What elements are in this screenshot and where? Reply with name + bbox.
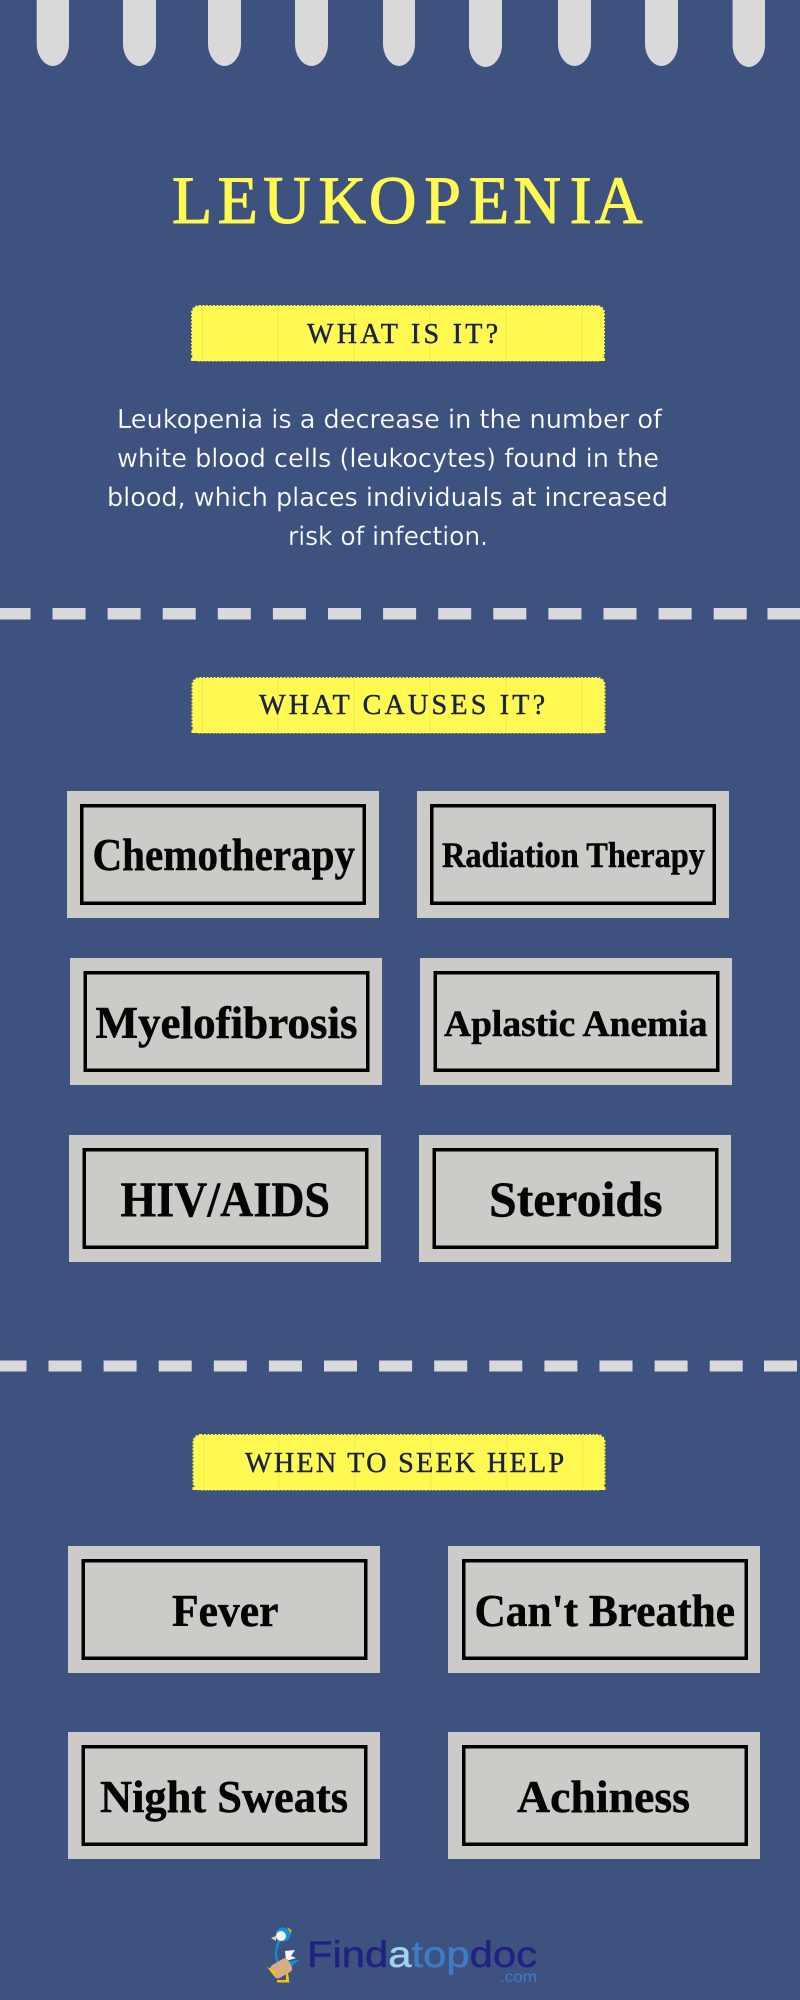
definition text: Leukopenia is a decrease in the number of (117, 405, 663, 435)
symptom card: night sweats (68, 1732, 380, 1859)
section label: what is it (191, 306, 605, 361)
section label: what causes it: WHAT CAUSES IT? (259, 690, 545, 721)
cause card: hiv/aids (69, 1135, 381, 1262)
symptom card: night sweats: Night Sweats (100, 1771, 348, 1822)
section label: when to seek help: WHEN TO SEEK HELP (245, 1448, 564, 1479)
cause card: radiation therapy (417, 791, 729, 918)
cause card: hiv/aids: HIV/AIDS (120, 1171, 330, 1227)
symptom card: can't breathe: Can't Breathe (474, 1585, 735, 1636)
cause card: steroids (419, 1135, 731, 1262)
logo domain: .com (500, 1969, 537, 1986)
section label: what is it: WHAT IS IT? (307, 319, 498, 350)
section label: what causes it (192, 678, 606, 733)
dashed divider 1 (0, 608, 800, 620)
symptom card: fever: Fever (172, 1585, 278, 1636)
cause card: myelofibrosis (70, 958, 382, 1085)
cause card: steroids: Steroids (489, 1171, 662, 1227)
symptom card: achiness (448, 1732, 760, 1859)
cause card: aplastic anemia (420, 958, 732, 1085)
logo wordmark: Find atopdoc (307, 1934, 537, 1975)
dashed divider 2 (0, 1360, 797, 1372)
definition text (107, 405, 668, 552)
definition text: risk of infection. (288, 522, 488, 552)
definition text: white blood cells (leukocytes) found in the (117, 444, 659, 474)
symptom card: achiness: Achiness (517, 1771, 690, 1822)
cause card: myelofibrosis: Myelofibrosis (96, 998, 358, 1048)
notebook binding pegs (37, 0, 765, 67)
cause card: chemotherapy: Chemotherapy (92, 830, 355, 880)
cause card: radiation therapy: Radiation Therapy (442, 835, 705, 875)
cause card: chemotherapy (67, 791, 379, 918)
cause card: aplastic anemia: Aplastic Anemia (444, 1004, 708, 1045)
symptom card: fever (68, 1546, 380, 1673)
symptom card: can't breathe (448, 1546, 760, 1673)
icon: duck mascot with bandage (267, 1927, 300, 1982)
section label: when to seek help (192, 1435, 606, 1490)
title: LEUKOPENIA (172, 163, 643, 238)
definition text: blood, which places individuals at increased (107, 483, 668, 513)
logo: findatopdoc (267, 1927, 537, 1986)
